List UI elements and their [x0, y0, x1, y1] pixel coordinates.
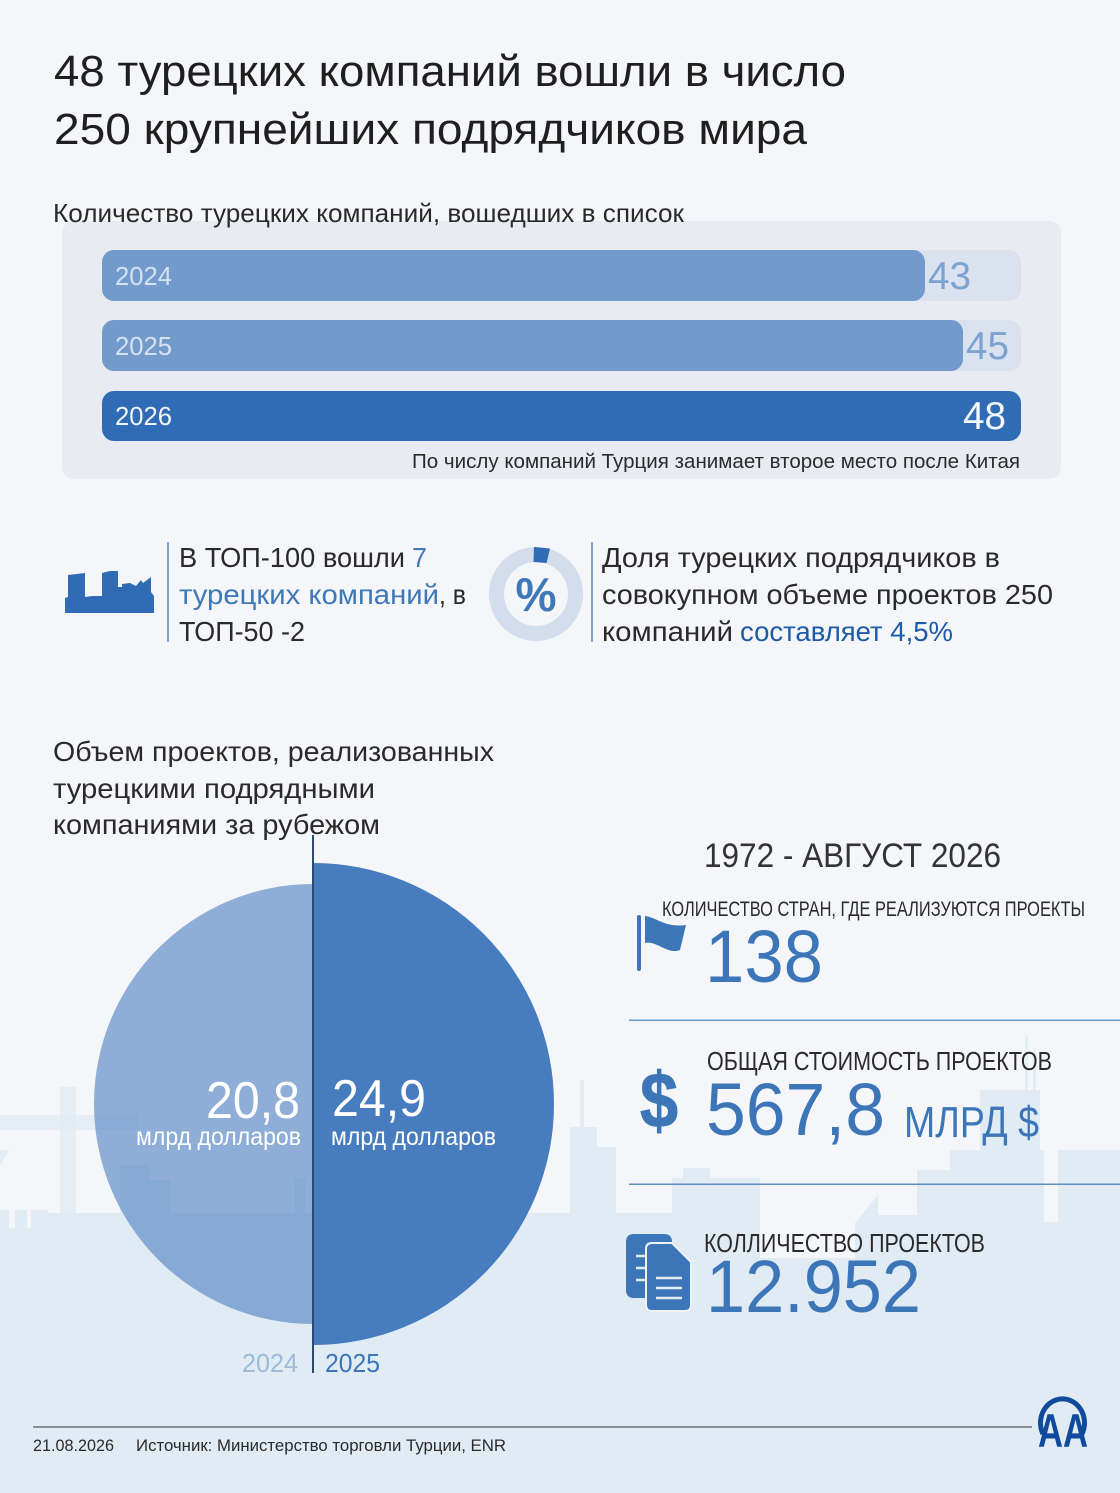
callout: share: совокупном объеме проектов 250: [602, 579, 1053, 610]
bar: 2026: 2026: [115, 401, 172, 431]
year labels: 2025: [325, 1348, 380, 1378]
stat: total value: ОБЩАЯ СТОИМОСТЬ ПРОЕКТОВ: [707, 1046, 1052, 1076]
callout: top 100: турецких компаний: [179, 579, 439, 610]
background skyline: [0, 1035, 1120, 1493]
heading: project volume: Объем проектов, реализованных: [53, 736, 494, 767]
bar: 2025: 45: [966, 325, 1009, 368]
bar: 2024: 43: [928, 255, 971, 298]
title: 48 турецких компаний вошли в число: [54, 47, 846, 96]
chart note: По числу компаний Турция занимает второе место после Китая: [412, 451, 1020, 473]
stat: project count: 12.952: [706, 1245, 921, 1328]
stat: total value: [640, 1046, 1052, 1151]
half circle: 2024: [94, 884, 313, 1324]
icon: documents: [626, 1234, 691, 1311]
bar: 2025: [102, 320, 1021, 371]
heading: project volume: компаниями за рубежом: [53, 809, 380, 840]
callout: share: Доля турецких подрядчиков в: [602, 542, 1000, 573]
callout: share: составляет 4,5%: [740, 616, 953, 647]
footer: Источник: Министерство торговли Турции, ENR: [136, 1436, 506, 1455]
callout: top 100: В ТОП-100 вошли: [179, 542, 405, 573]
period heading: 1972 - АВГУСТ 2026: [704, 837, 1001, 875]
half circle: 2024: 20,8: [206, 1072, 300, 1130]
half circle: 2024: млрд долларов: [136, 1123, 301, 1151]
stat: total value: МЛРД $: [904, 1098, 1039, 1147]
footer: 21.08.2026: [33, 1436, 114, 1455]
year labels: [242, 1348, 380, 1378]
footer: [33, 1426, 1032, 1455]
half circle: 2025: 24,9: [332, 1070, 426, 1128]
icon: percent donut: [496, 547, 576, 634]
heading: project volume: турецкими подрядными: [53, 773, 375, 804]
heading: project volume: [53, 736, 494, 840]
panel: company count bar chart: [53, 198, 1061, 479]
bar: 2026: [102, 391, 1021, 441]
title: 250 крупнейших подрядчиков мира: [54, 105, 808, 154]
callout: top 100: , в: [439, 579, 466, 610]
chart: half circles: [94, 835, 554, 1378]
bar: 2025: 2025: [115, 331, 172, 361]
callout: share: компаний: [602, 616, 733, 647]
logo: AA: AA: [1038, 1404, 1088, 1457]
bar: 2024: 2024: [115, 261, 172, 291]
callout: top 100: [167, 542, 466, 647]
stat: total value: 567,8: [706, 1068, 885, 1151]
half circle: 2025: [313, 863, 554, 1345]
icon: buildings: [65, 571, 154, 613]
callout: share: [591, 542, 1053, 647]
icon: dollar: $: [640, 1056, 678, 1144]
callout: top 100: 7: [412, 542, 427, 573]
year labels: 2024: [242, 1348, 298, 1378]
logo: AA: [1038, 1399, 1088, 1457]
half circle: 2025: млрд долларов: [331, 1123, 496, 1151]
stat: countries: 138: [705, 915, 823, 998]
icon: flag: [637, 915, 686, 971]
bar: 2024: [102, 250, 1021, 301]
stat: project count: КОЛЛИЧЕСТВО ПРОЕКТОВ: [704, 1228, 985, 1258]
icon: percent donut: %: [516, 568, 556, 621]
stat: project count: [626, 1228, 985, 1328]
callout: top 100: ТОП-50 -2: [179, 616, 305, 647]
chart heading: Количество турецких компаний, вошедших в список: [53, 198, 685, 228]
title: [54, 47, 846, 154]
bar: 2026: 48: [963, 395, 1006, 438]
stat: countries: [637, 898, 1085, 998]
